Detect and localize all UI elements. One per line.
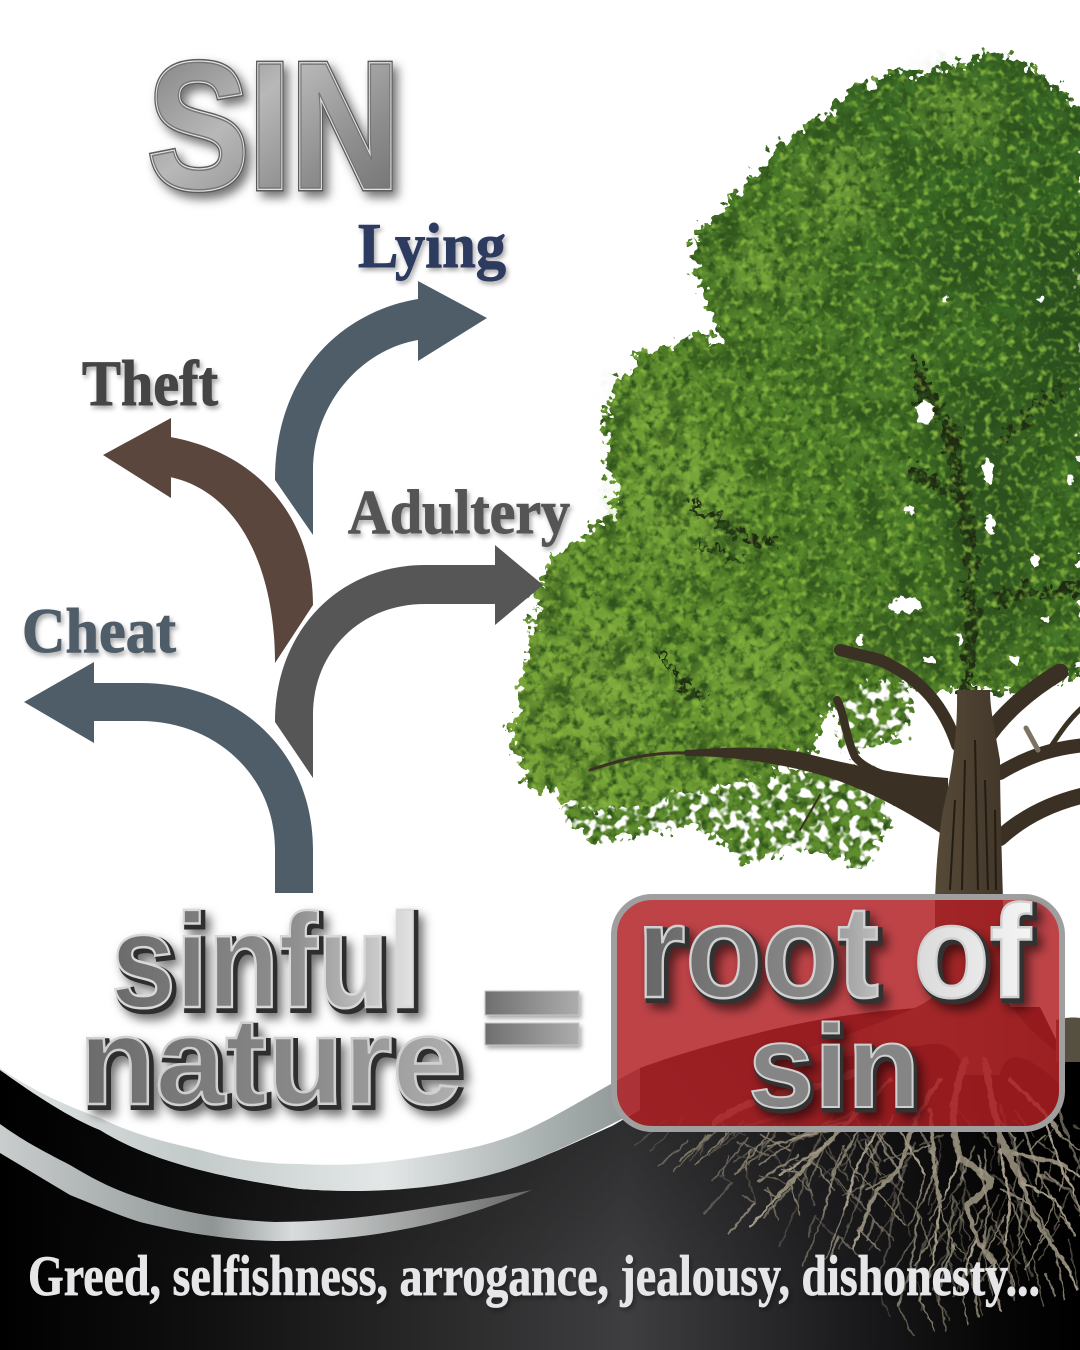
tree: shaded foliage <box>705 210 1080 670</box>
heading: sin: sin <box>750 1004 922 1136</box>
roots <box>635 1060 1080 1336</box>
tree: branches inside foliage <box>655 363 1080 700</box>
tree: sparse lower foliage <box>560 670 912 872</box>
tree: foliage <box>510 50 1080 808</box>
arrow: cheat <box>24 662 313 893</box>
label: Adultery: Adultery <box>348 479 570 547</box>
equals sign <box>485 991 579 1045</box>
label: Theft: Theft <box>82 348 218 420</box>
heading: nature: nature <box>82 996 465 1134</box>
tree: white gaps in foliage <box>856 295 1074 664</box>
label: Lying: Lying <box>358 210 506 281</box>
heading: root of: root of <box>640 881 1035 1028</box>
heading: sin: sin <box>748 1001 920 1133</box>
tree <box>510 50 1080 1085</box>
title: SIN: SIN <box>148 26 400 227</box>
panel: root of sin box <box>614 878 1062 1136</box>
tree: big branches <box>590 650 1080 838</box>
bottom dark wave panel <box>0 1007 1080 1350</box>
heading: sinful: sinful <box>114 890 424 1039</box>
silver swoosh lower <box>0 1124 532 1241</box>
title: SIN: SIN <box>148 26 400 227</box>
silver swoosh upper <box>0 1068 640 1191</box>
heading: root of: root of <box>637 878 1032 1025</box>
label: Cheat: Cheat <box>22 596 176 666</box>
heading: nature: nature <box>79 993 462 1131</box>
arrow: lying <box>275 281 487 535</box>
heading: sinful: sinful <box>111 887 421 1036</box>
arrow: theft <box>103 418 313 663</box>
tree: lit foliage lobes <box>560 85 1005 750</box>
arrow: adultery <box>275 545 543 778</box>
tree: trunk <box>770 690 1066 1085</box>
title: SIN: SIN <box>148 26 400 227</box>
rock at right edge of root zone <box>1056 1018 1080 1062</box>
